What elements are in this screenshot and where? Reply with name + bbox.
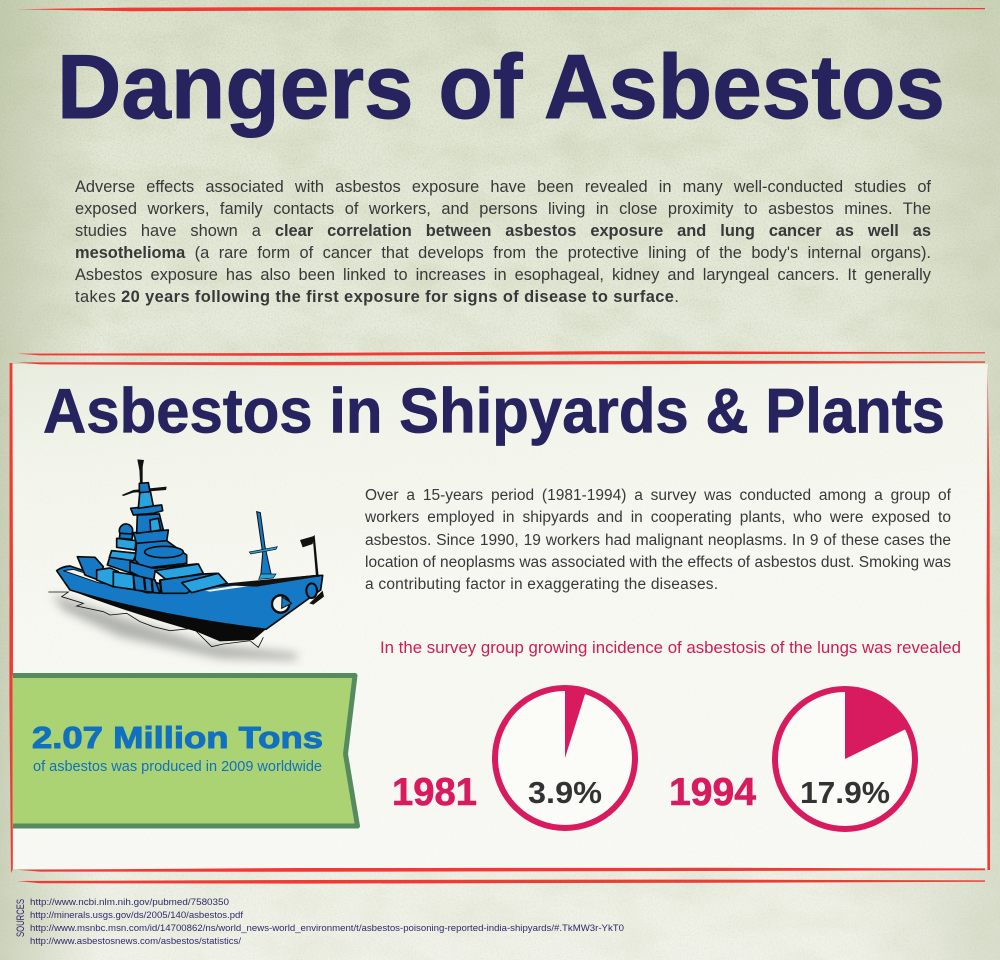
sources: http://www.asbestosnews.com/asbestos/statistics/ [30, 936, 241, 947]
intro paragraph: takes 20 years following the first exposure for signs of disease to surface. [75, 288, 679, 306]
section heading: Asbestos in Shipyards & Plants [43, 376, 945, 446]
chart: 1981 pie [392, 688, 635, 828]
banner outline [13, 676, 358, 826]
intro paragraph: studies have shown a clear correlation between asbestos exposure and lung cancer as well as [75, 222, 931, 240]
survey paragraph [365, 487, 951, 593]
ship bow details [144, 577, 161, 593]
rear mast and flag [257, 512, 272, 577]
chart: 1994 pie [669, 689, 915, 829]
intro paragraph: exposed workers, family contacts of workers, and persons living in close proximity to asbestos mines. The [75, 200, 931, 218]
intro paragraph: mesothelioma (a rare form of cancer that develops from the protective lining of the body's internal organs). [75, 244, 931, 262]
black keel [68, 589, 267, 641]
sources: http://www.msnbc.msn.com/id/14700862/ns/world_news-world_environment/t/asbestos-poisoning-reported-india-shipyards/#.TkMW3r-YkT0 [30, 923, 624, 934]
hull [57, 566, 323, 629]
water waves [48, 592, 263, 647]
red frame of shipyards panel [9, 351, 990, 884]
banner fill [12, 676, 358, 826]
panel background: shipyards [11, 364, 988, 869]
chart: 1981 pie: 1981 [392, 771, 477, 814]
survey paragraph: asbestos. Since 1990, 19 workers had malignant neoplasms. In 9 of these cases the [365, 532, 951, 549]
green banner [12, 676, 358, 826]
illustration: blue warship [48, 459, 324, 660]
banner caption: of asbestos was produced in 2009 worldwide [33, 758, 322, 775]
sources: http://www.ncbi.nlm.nih.gov/pubmed/7580350 [30, 897, 229, 908]
survey paragraph: Over a 15-years period (1981-1994) a survey was conducted among a group of [365, 487, 951, 504]
ship shadow [52, 594, 297, 660]
intro paragraph: Adverse effects associated with asbestos exposure have been revealed in many well-conducted studies of [75, 178, 931, 196]
top red rule [17, 7, 985, 11]
chart: 1994 pie: 17.9% [800, 775, 890, 810]
title: Dangers of Asbestos [57, 37, 945, 138]
survey paragraph: a contributing factor in exaggerating the diseases. [365, 576, 718, 593]
sources: http://minerals.usgs.gov/ds/2005/140/asbestos.pdf [30, 910, 243, 921]
intro paragraph: Asbestos exposure has also been linked to increases in esophageal, kidney and laryngeal cancers. It generally [75, 266, 931, 284]
deck [63, 569, 147, 591]
mast [139, 460, 143, 483]
chart: 1994 pie: 1994 [669, 771, 756, 814]
survey paragraph: workers employed in shipyards and in cooperating plants, who were exposed to [365, 509, 951, 526]
chart: 1981 pie: 3.9% [528, 775, 602, 810]
survey caption: In the survey group growing incidence of asbestosis of the lungs was revealed [380, 638, 961, 657]
banner headline: 2.07 Million Tons [32, 720, 323, 755]
superstructure [77, 483, 227, 593]
sources [15, 897, 624, 947]
sources: SOURCES [15, 899, 27, 937]
intro paragraph [75, 178, 931, 306]
survey paragraph: location of neoplasms was associated with the effects of asbestos dust. Smoking was [365, 554, 951, 571]
